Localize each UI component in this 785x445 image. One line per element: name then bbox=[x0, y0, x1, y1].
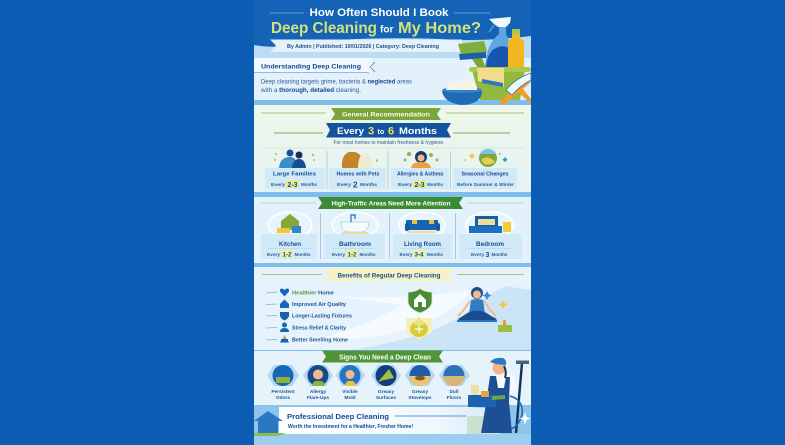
icon: bathtub bbox=[332, 212, 378, 238]
panel: signs you need a deep clean bbox=[254, 350, 531, 410]
banner: every 3 to 6 months: Months bbox=[399, 126, 437, 136]
card: large families: Large Families bbox=[273, 172, 316, 178]
card: living room: Living Room bbox=[404, 242, 441, 248]
icon: chevron bbox=[370, 62, 375, 72]
card: homes with pets bbox=[329, 152, 386, 190]
banner: every 3 to 6 months: Every bbox=[337, 126, 364, 136]
sign: dull floors: Floors bbox=[447, 395, 462, 401]
brush bbox=[458, 41, 487, 54]
body bbox=[488, 374, 517, 396]
panel: high-traffic areas bbox=[254, 197, 531, 263]
title: Deep Cleaning bbox=[271, 20, 377, 37]
card: bathroom bbox=[324, 212, 385, 259]
soap bowl bbox=[442, 91, 482, 105]
benefit: longer-lasting fixtures: Longer-Lasting Fixtures bbox=[292, 314, 352, 320]
byline ribbon bbox=[270, 40, 462, 52]
card: bathroom: Months bbox=[360, 252, 376, 257]
illustration: cleaning supplies bucket bbox=[442, 17, 531, 105]
head and cap bbox=[492, 362, 506, 374]
icon: season globe bbox=[464, 149, 507, 167]
sign: visible mold: Visible bbox=[342, 389, 358, 395]
icon: green candle bbox=[498, 320, 512, 332]
title: My Home? bbox=[398, 20, 481, 37]
sign: greasy stovetops: Greasy bbox=[412, 389, 428, 395]
card: bathroom: 1-2 bbox=[347, 252, 357, 258]
sign: dull floors: Dull bbox=[449, 389, 459, 395]
page panel background bbox=[254, 0, 531, 445]
illustration: cleaner with supplies bbox=[468, 358, 530, 433]
sign: allergy flare-ups bbox=[303, 365, 333, 401]
card: bedroom: Bedroom bbox=[476, 242, 504, 248]
header banner bbox=[254, 0, 531, 58]
card: large families bbox=[265, 150, 325, 189]
card: homes with pets: Months bbox=[360, 182, 377, 188]
card: seasonal changes bbox=[453, 149, 517, 189]
card: homes with pets: Every bbox=[337, 182, 351, 188]
sign: visible mold: Mold bbox=[344, 395, 356, 401]
panel: benefits bbox=[254, 267, 531, 350]
card: allergies and asthma: Allergies & Asthma bbox=[397, 172, 444, 178]
heading: Understanding Deep Cleaning bbox=[261, 64, 361, 70]
title bbox=[270, 7, 490, 37]
card: kitchen bbox=[261, 212, 317, 259]
card: living room: Every bbox=[400, 252, 413, 257]
body text: Deep cleaning targets grime, bacteria & neglected areas bbox=[261, 80, 412, 86]
sparkle bbox=[520, 412, 530, 425]
illustration: person meditating bbox=[457, 287, 508, 322]
yellow bottle bbox=[508, 30, 524, 68]
benefit: healthier home: Healthier Home bbox=[292, 290, 334, 296]
icon: person with sparkles bbox=[404, 151, 438, 168]
spray bottle bbox=[485, 27, 512, 68]
card: living room: 3-4 bbox=[414, 252, 424, 258]
banner: every 3 to 6 months: 3 bbox=[368, 126, 374, 138]
panel: understanding deep cleaning bbox=[254, 58, 531, 100]
banner: general recommendation bbox=[261, 108, 524, 120]
sign: greasy surfaces: Greasy bbox=[378, 389, 394, 395]
sign: greasy surfaces: Surfaces bbox=[376, 395, 396, 401]
card: large families: Months bbox=[301, 182, 317, 188]
icon: yellow cleanliness badge bbox=[406, 317, 432, 339]
body text: with a thorough, detailed cleaning. bbox=[260, 88, 361, 94]
card: seasonal changes: Seasonal Changes bbox=[462, 172, 508, 178]
icon: house bbox=[254, 411, 286, 436]
card: kitchen: Kitchen bbox=[279, 242, 301, 248]
towel bbox=[477, 68, 504, 87]
card: bedroom bbox=[459, 212, 522, 259]
card: large families: 2-3 bbox=[287, 182, 298, 189]
icon: bed bbox=[466, 212, 514, 238]
card: homes with pets: Homes with Pets bbox=[336, 172, 380, 178]
sign: greasy stovetops: Stovetops bbox=[408, 395, 432, 401]
banner: high-traffic: High-Traffic Areas Need More Attention bbox=[332, 202, 451, 208]
banner: general recommendation: General Recommendation bbox=[342, 112, 430, 118]
body text bbox=[260, 80, 412, 94]
sign: persistent odors: Persistent bbox=[271, 389, 295, 395]
sign: greasy surfaces bbox=[371, 365, 401, 401]
card: bathroom: Every bbox=[332, 252, 346, 257]
panel: professional deep cleaning bbox=[254, 405, 531, 445]
card: bedroom: Months bbox=[492, 252, 508, 257]
bucket bbox=[472, 70, 525, 100]
banner: benefits: Benefits of Regular Deep Cleaning bbox=[338, 272, 441, 280]
sign: allergy flare-ups: Allergy bbox=[310, 389, 326, 395]
card: allergies and asthma bbox=[391, 151, 449, 189]
card: living room: Months bbox=[427, 252, 443, 257]
sign: persistent odors: Odors bbox=[276, 395, 290, 401]
banner: benefits bbox=[324, 268, 454, 281]
card: bedroom: Every bbox=[471, 252, 485, 257]
card: kitchen: Months bbox=[294, 252, 311, 257]
title: How Often Should I Book bbox=[310, 7, 449, 19]
card: kitchen: 1-2 bbox=[282, 252, 292, 258]
benefit: better smelling home: Better Smelling Home bbox=[292, 338, 348, 344]
card: living room bbox=[393, 212, 452, 259]
icon: family bbox=[274, 150, 315, 168]
card: large families: Every bbox=[271, 182, 285, 188]
sign: greasy stovetops bbox=[405, 365, 435, 401]
mop handle bbox=[516, 363, 522, 433]
card: bedroom: 3 bbox=[486, 252, 490, 259]
banner: every 3 to 6 months: 6 bbox=[388, 126, 394, 138]
banner: every 3 to 6 months: to bbox=[378, 129, 384, 136]
hose bbox=[508, 396, 522, 430]
card: homes with pets: 2 bbox=[353, 180, 358, 190]
icon: sofa bbox=[399, 212, 445, 238]
banner: signs: Signs You Need a Deep Clean bbox=[339, 354, 431, 362]
banner: high-traffic bbox=[318, 197, 463, 209]
icon: green home shield bbox=[408, 288, 432, 313]
sign: dull floors bbox=[439, 365, 470, 401]
banner: signs bbox=[322, 350, 443, 362]
subtitle: For most homes to maintain freshness & hygiene. bbox=[334, 140, 444, 146]
sign: allergy flare-ups: Flare-Ups bbox=[307, 395, 329, 401]
card: kitchen: Every bbox=[267, 252, 281, 257]
heading: Professional Deep Cleaning bbox=[287, 412, 390, 421]
card: allergies and asthma: Months bbox=[427, 182, 443, 188]
subheading: Worth the Investment for a Healthier, Fresher Home! bbox=[288, 424, 413, 430]
card: bathroom: Bathroom bbox=[339, 242, 371, 248]
benefit list bbox=[266, 288, 352, 344]
card: allergies and asthma: 2-3 bbox=[414, 182, 425, 189]
title: for bbox=[380, 24, 393, 36]
icon: kitchen house bbox=[268, 212, 312, 238]
icon: pets bbox=[342, 152, 378, 168]
card: allergies and asthma: Every bbox=[398, 182, 412, 188]
card: seasonal changes: Before Summer & Winter bbox=[457, 182, 514, 187]
banner: every 3 to 6 months bbox=[274, 123, 510, 138]
sign: visible mold bbox=[336, 365, 365, 401]
sign: persistent odors bbox=[267, 365, 299, 401]
caddy bbox=[468, 395, 496, 407]
benefit: stress relief: Stress Relief & Clarity bbox=[292, 326, 347, 332]
byline ribbon: By Admin | Published: 19/01/2026 | Category: Deep Cleaning bbox=[287, 44, 439, 50]
panel: general recommendation bbox=[254, 105, 531, 192]
benefit: improved air quality: Improved Air Quality bbox=[292, 302, 347, 308]
scrub brush bbox=[499, 78, 531, 105]
